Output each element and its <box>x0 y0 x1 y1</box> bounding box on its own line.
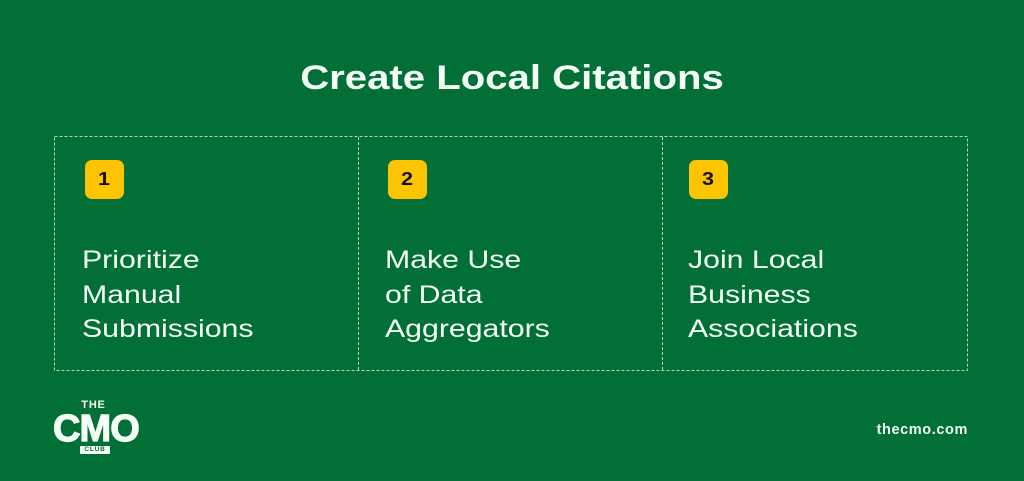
text: Make Use of Data Aggregators: of Data <box>385 280 483 308</box>
badge 1: 1 <box>98 169 111 189</box>
text: Make Use of Data Aggregators <box>385 246 550 343</box>
text: Prioritize Manual Submissions: Manual <box>82 280 181 308</box>
panel: step 1 <box>82 160 253 343</box>
logo: The CMO Club <box>53 399 139 454</box>
logo word: CLUB: CLUB <box>84 446 106 453</box>
text: Make Use of Data Aggregators: Aggregators <box>385 315 550 343</box>
text: Join Local Business Associations: Join Local <box>688 246 824 274</box>
text: Prioritize Manual Submissions <box>82 246 253 343</box>
panel: step 2 <box>385 160 550 343</box>
text: Prioritize Manual Submissions: Prioritize <box>82 246 200 274</box>
logo word: CLUB <box>80 446 110 454</box>
website url: thecmo.com <box>877 422 968 438</box>
badge 3: 3 <box>702 169 715 189</box>
text: Join Local Business Associations <box>688 246 858 343</box>
panel: step 3 <box>688 160 858 343</box>
badge 3 <box>689 160 728 199</box>
text: Prioritize Manual Submissions: Submissions <box>82 315 253 343</box>
badge 2: 2 <box>401 169 414 189</box>
badge 2 <box>388 160 427 199</box>
title: Create Local Citations <box>300 59 724 97</box>
logo word: THE: THE <box>81 399 106 411</box>
text: Make Use of Data Aggregators: Make Use <box>385 246 521 274</box>
text: Join Local Business Associations: Business <box>688 280 811 308</box>
badge 1 <box>85 160 124 199</box>
logo word: CMO: CMO <box>53 408 139 450</box>
text: Join Local Business Associations: Associations <box>688 315 858 343</box>
